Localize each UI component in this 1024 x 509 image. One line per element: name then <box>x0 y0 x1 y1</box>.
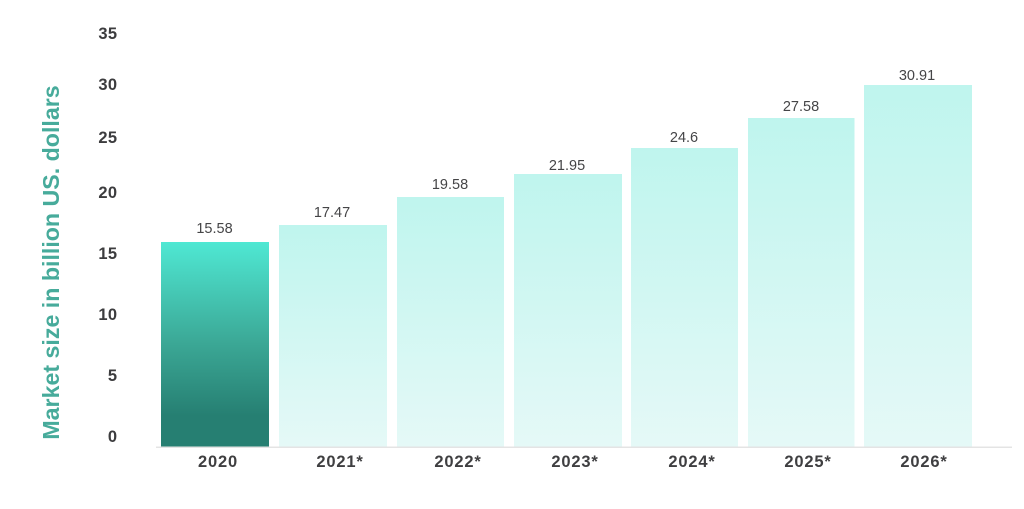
bar: 2025 <box>748 99 854 471</box>
y-axis labels: 10 <box>98 306 118 324</box>
y-axis labels: 5 <box>108 367 118 385</box>
bar: 2024: 24.6 <box>670 130 698 146</box>
bar chart <box>156 68 1012 471</box>
y-axis labels: 25 <box>98 129 118 147</box>
bar: 2022: 2022* <box>434 453 482 471</box>
bar: 2022: 19.58 <box>432 177 468 193</box>
y-axis labels: 20 <box>98 184 118 202</box>
bar: 2026: 2026* <box>900 453 948 471</box>
y-axis labels <box>98 25 118 446</box>
bar: 2021: 2021* <box>316 453 364 471</box>
y-axis labels: 35 <box>98 25 118 43</box>
bar: 2025: 27.58 <box>783 99 819 115</box>
y-axis labels: 30 <box>98 76 118 94</box>
y-axis title: Market size in billion US. dollars <box>38 85 64 440</box>
y-axis labels: 15 <box>98 245 118 263</box>
bar: 2024 <box>631 130 738 471</box>
bar: 2023 <box>514 158 622 471</box>
bar: 2024: 2024* <box>668 453 716 471</box>
bar: 2023: 2023* <box>551 453 599 471</box>
bar: 2023: 21.95 <box>549 158 585 174</box>
bar: 2025: 2025* <box>784 453 832 471</box>
bar: 2021: 17.47 <box>314 205 350 221</box>
bar: 2026 <box>864 68 972 471</box>
bar: 2020: 15.58 <box>196 221 233 237</box>
bar: 2021 <box>279 205 387 471</box>
bar: 2022 <box>397 177 504 471</box>
bar: 2026: 30.91 <box>899 68 935 84</box>
y-axis labels: 0 <box>108 428 118 446</box>
bar: 2020: 2020 <box>198 453 238 471</box>
baseline <box>156 446 1012 448</box>
bar: 2020 <box>161 221 269 471</box>
